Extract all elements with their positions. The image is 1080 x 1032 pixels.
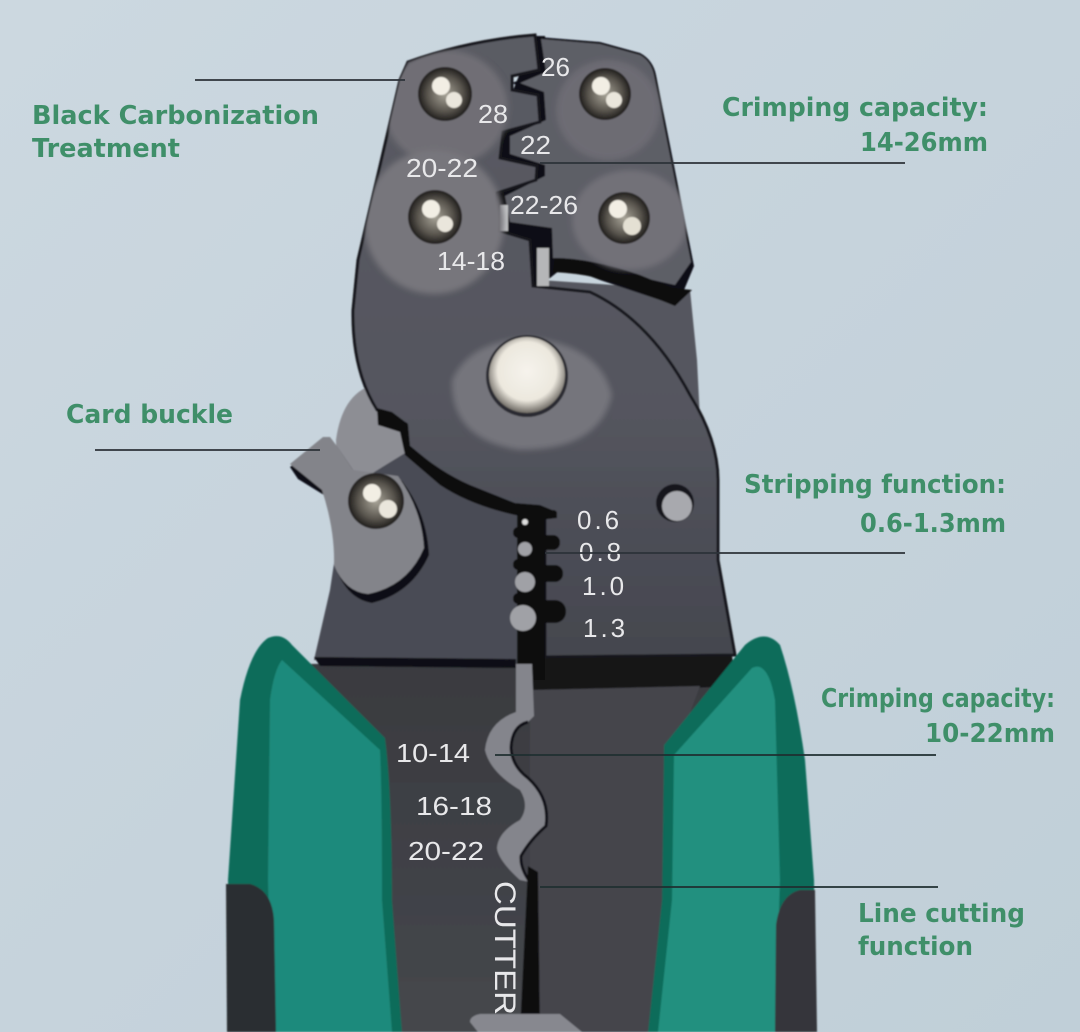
leader line: card buckle bbox=[95, 449, 320, 451]
latch screw bbox=[348, 473, 404, 529]
label: black carbonization treatment bbox=[32, 101, 319, 164]
lower jaw left bbox=[314, 450, 560, 668]
jaw size markings: CUTTER bbox=[488, 881, 521, 1015]
jaw size markings: 1.0 bbox=[582, 571, 627, 601]
lower metal handle plate bbox=[300, 662, 760, 1032]
crimping wave bbox=[485, 664, 547, 882]
top edge of lower plate bbox=[314, 657, 516, 668]
jaw size markings: 0.8 bbox=[579, 537, 624, 567]
label: stripping function: 0.6-1.3mm bbox=[860, 509, 1006, 539]
leader line: treatment bbox=[195, 79, 405, 81]
jaw size markings: 20-22 bbox=[406, 153, 478, 183]
label: black carbonization treatment: Black Carbonization bbox=[32, 101, 319, 131]
leader line: crimping 10-22 bbox=[495, 754, 936, 756]
leader line: cutting bbox=[540, 886, 938, 888]
silver tab bottom bbox=[470, 1014, 582, 1032]
right jaw of crimping head bbox=[497, 37, 694, 304]
gray disc behind latch bbox=[336, 385, 420, 560]
jaw size markings: 10-14 bbox=[396, 738, 470, 768]
small hole bbox=[656, 484, 694, 522]
jaw size markings: 0.6 bbox=[577, 505, 622, 535]
label: crimping capacity 14-26mm: 14-26mm bbox=[860, 128, 988, 158]
right black grip bbox=[775, 890, 817, 1032]
dark head centre underlay bbox=[495, 36, 560, 290]
jaw size markings: 22 bbox=[520, 130, 551, 160]
cutter blade bbox=[520, 866, 540, 1030]
jaw size markings bbox=[396, 52, 628, 1015]
label: crimping capacity 10-22mm bbox=[821, 684, 1055, 749]
wedge behind right jaw bbox=[540, 280, 700, 420]
jaw size markings: 26 bbox=[541, 52, 570, 82]
crimp head screws bbox=[408, 67, 650, 244]
jaw size markings: 20-22 bbox=[408, 836, 484, 866]
latch bbox=[290, 437, 424, 594]
label: black carbonization treatment: Treatment bbox=[32, 134, 180, 164]
jaw size markings: 1.3 bbox=[583, 613, 628, 643]
jaw size markings: 14-18 bbox=[437, 246, 505, 276]
black gap along jaw bbox=[377, 408, 557, 520]
label: line cutting function: function bbox=[858, 932, 973, 962]
leader line: stripping bbox=[545, 552, 905, 554]
label: stripping function bbox=[744, 470, 1006, 539]
pivot rivet bbox=[486, 335, 568, 417]
leader line: crimping 14-26 bbox=[540, 162, 905, 164]
label: crimping capacity 14-26mm bbox=[722, 93, 988, 158]
label: crimping capacity 10-22mm: 10-22mm bbox=[925, 719, 1055, 749]
left black grip bbox=[226, 884, 276, 1032]
label: card buckle: Card buckle bbox=[66, 400, 233, 430]
stripping notches bbox=[510, 508, 566, 680]
silver slots bbox=[537, 248, 549, 286]
pliers illustration bbox=[226, 35, 817, 1032]
jaw size markings: 28 bbox=[478, 99, 508, 129]
latch shadow bbox=[290, 440, 429, 603]
label: line cutting function: Line cutting bbox=[858, 899, 1025, 929]
label: crimping capacity 14-26mm: Crimping capacity: bbox=[722, 93, 988, 123]
label: stripping function: Stripping function: bbox=[744, 470, 1006, 500]
main body with left head and pivot bbox=[353, 35, 735, 657]
shading patches bbox=[364, 50, 688, 450]
lower right black band bbox=[530, 645, 738, 692]
left handle bbox=[228, 636, 402, 1032]
label: line cutting function bbox=[858, 899, 1025, 962]
jaw size markings: 16-18 bbox=[416, 791, 492, 821]
jaw size markings: 22-26 bbox=[510, 190, 578, 220]
right handle bbox=[648, 636, 816, 1032]
black curve under right jaw bbox=[553, 258, 692, 306]
